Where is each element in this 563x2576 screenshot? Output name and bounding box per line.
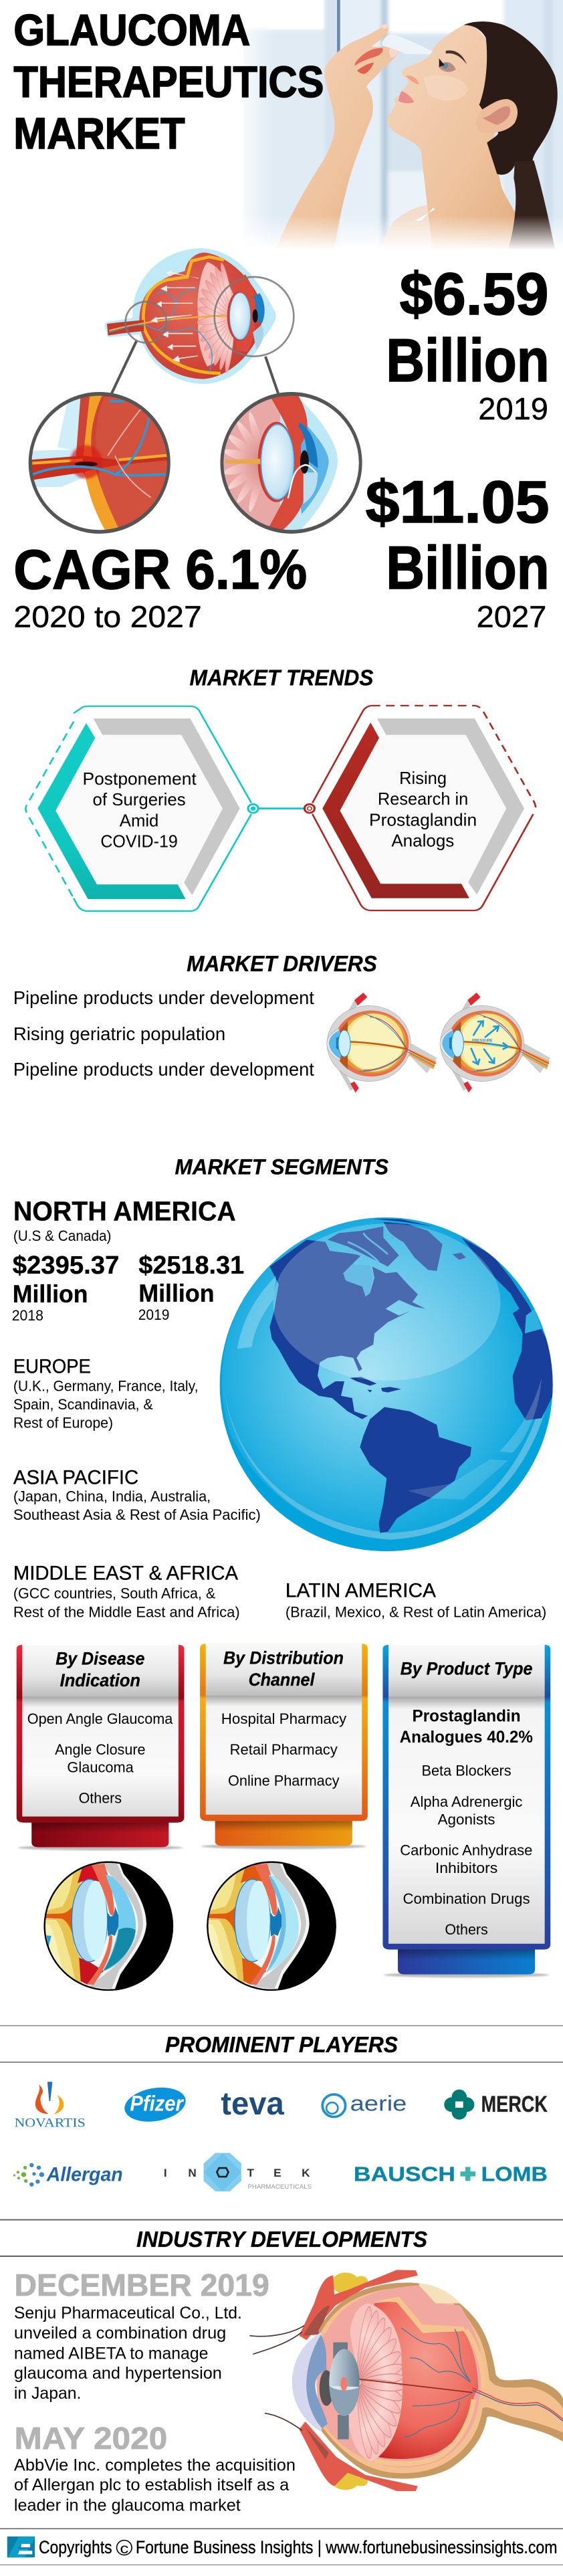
ciliary folds	[348, 2303, 403, 2462]
card: by distribution channel	[200, 1644, 368, 1849]
region: north america: Million	[138, 1280, 215, 1308]
hexagon: rising research: Rising	[399, 769, 447, 787]
region: north america: 2019	[138, 1306, 169, 1323]
logo: Allergan: Allergan	[46, 2164, 123, 2185]
photo: woman applying eye drops	[241, 0, 563, 250]
card: by disease indication: By Disease	[55, 1648, 144, 1669]
connector between hexagons	[248, 804, 314, 813]
card: by product type: Alpha Adrenergic	[411, 1793, 522, 1810]
logo: Merck	[444, 2090, 548, 2120]
connector lines	[112, 341, 278, 393]
region: asia pacific: (Japan, China, India, Australia,	[13, 1488, 211, 1504]
lashes	[249, 2326, 304, 2430]
hexagon: postponement of surgeries	[25, 706, 251, 911]
card: by product type: Agonists	[438, 1811, 495, 1827]
icon: eye with raised pressure: PRESSURE	[472, 1038, 493, 1043]
section: market segments	[12, 1155, 546, 1620]
region: north america: (U.S & Canada)	[13, 1227, 111, 1244]
stat: 2019 market value	[386, 261, 550, 427]
title and headline figures	[13, 6, 550, 633]
hair	[463, 21, 558, 175]
title: THERAPEUTICS	[13, 58, 324, 107]
logo: Inotek Pharmaceuticals: E	[273, 2167, 282, 2179]
list: market drivers: Rising geriatric population	[13, 1024, 225, 1044]
logo: Inotek Pharmaceuticals: T	[247, 2167, 255, 2179]
logo: Bausch + Lomb: BAUSCH	[354, 2163, 455, 2185]
list: market drivers	[13, 988, 314, 1080]
development: May 2020: MAY 2020	[14, 2421, 167, 2456]
cornea, iris and lens	[316, 2333, 339, 2430]
card: by disease indication: Open Angle Glaucoma	[27, 1710, 173, 1727]
card: by disease indication: Glaucoma	[67, 1759, 134, 1776]
stat: 2019 market value: Billion	[386, 326, 550, 395]
region: north america	[12, 1197, 244, 1324]
stat: 2019 market value: 2019	[478, 392, 548, 427]
illustration: anatomical eye	[249, 2270, 563, 2491]
list: market drivers: Pipeline products under development	[13, 1060, 314, 1080]
development: May 2020: leader in the glaucoma market	[14, 2496, 241, 2515]
region: north america: $2518.31	[138, 1252, 244, 1280]
card: by distribution channel: Retail Pharmacy	[230, 1741, 338, 1758]
card: by disease indication: Others	[79, 1789, 122, 1806]
region: middle east and africa	[13, 1561, 240, 1620]
logo: Bausch + Lomb: LOMB	[481, 2163, 548, 2185]
hexagon: rising research: Research in	[378, 789, 468, 809]
heading: market trends: MARKET TRENDS	[190, 665, 373, 690]
stat: CAGR	[13, 538, 307, 633]
region: europe: Spain, Scandinavia, &	[13, 1396, 153, 1413]
stat: CAGR: CAGR 6.1%	[13, 538, 307, 601]
stat: 2019 market value: $6.59	[400, 261, 549, 327]
land: north america	[269, 1240, 426, 1419]
region: europe	[13, 1355, 198, 1431]
land: south america	[360, 1407, 471, 1533]
arrows	[150, 270, 199, 363]
ponytail	[508, 161, 555, 249]
region: middle east and africa: (GCC countries, South Africa, &	[13, 1585, 215, 1601]
logo: Novartis	[14, 2082, 86, 2131]
logo: Inotek Pharmaceuticals	[164, 2153, 312, 2191]
land: caribbean islands	[350, 1377, 401, 1393]
card: by product type: Prostaglandin	[412, 1707, 521, 1726]
card: by product type: Others	[445, 1921, 488, 1938]
highlight over the northern hemisphere	[273, 1223, 500, 1381]
logo: Inotek Pharmaceuticals: N	[188, 2167, 197, 2179]
heading: market drivers: MARKET DRIVERS	[187, 951, 377, 976]
card: by product type: Beta Blockers	[421, 1763, 512, 1779]
card: by disease indication: Indication	[60, 1670, 140, 1690]
arm and hand	[276, 25, 399, 249]
stat: 2027 market value	[366, 469, 550, 633]
hexagon: postponement of surgeries: Postponement	[83, 769, 197, 788]
section: trends and drivers	[13, 665, 536, 1080]
magnified view: optic nerve	[28, 392, 171, 534]
sclera and optic nerve	[319, 2282, 563, 2479]
stat: 2027 market value: $11.05	[366, 469, 550, 536]
section: segmentation cards	[0, 1644, 563, 2025]
land: europe and africa	[370, 1219, 555, 1420]
logo: Inotek Pharmaceuticals: PHARMACEUTICALS	[248, 2183, 312, 2191]
development: May 2020: of Allergan plc to establish itself as a	[14, 2476, 290, 2494]
card: by distribution channel: By Distribution	[223, 1648, 344, 1668]
card: by distribution channel: Online Pharmacy	[228, 1772, 340, 1789]
region: north america: 2018	[12, 1307, 43, 1324]
card: by distribution channel: Channel	[249, 1670, 315, 1690]
region: north america: NORTH AMERICA	[13, 1197, 236, 1227]
logo: Inotek Pharmaceuticals: I	[164, 2167, 167, 2179]
icon: lens cross-section with open angle	[44, 1861, 174, 1991]
card: by disease indication	[17, 1645, 184, 1850]
title: GLAUCOMA	[13, 6, 250, 56]
globe	[214, 1217, 555, 1574]
logo: Pfizer	[122, 2083, 189, 2126]
icon: lens cross-section with closed angle	[207, 1861, 336, 1991]
development: December 2019: Senju Pharmaceutical Co., Ltd.	[14, 2304, 242, 2322]
region: north america: $2395.37	[13, 1252, 119, 1280]
region: asia pacific	[13, 1466, 261, 1523]
region: middle east and africa: Rest of the Middle East and Africa)	[13, 1603, 240, 1620]
development: May 2020	[14, 2421, 296, 2515]
stat: CAGR: 2020 to 2027	[13, 600, 202, 633]
region: middle east and africa: MIDDLE EAST & AFRICA	[13, 1561, 239, 1584]
region: asia pacific: Southeast Asia & Rest of Asia Pacific)	[13, 1506, 261, 1523]
heading: prominent players: PROMINENT PLAYERS	[165, 2033, 398, 2058]
hexagon: rising research: Analogs	[391, 831, 454, 850]
development: December 2019: DECEMBER 2019	[14, 2268, 269, 2302]
region: europe: Rest of Europe)	[13, 1414, 113, 1431]
region: europe: (U.K., Germany, France, Italy,	[13, 1378, 198, 1394]
arctic channels and hudson bay	[330, 1224, 401, 1296]
footer: logo and copyright: c	[120, 2541, 129, 2557]
eyelid muscles and fat	[299, 2270, 418, 2491]
stat: 2027 market value: 2027	[477, 600, 546, 633]
region: latin america: LATIN AMERICA	[286, 1579, 437, 1601]
region: asia pacific: ASIA PACIFIC	[13, 1466, 138, 1488]
card: by product type: Inhibitors	[435, 1860, 497, 1876]
card: by disease indication: Angle Closure	[55, 1741, 145, 1758]
title: MARKET	[13, 109, 185, 159]
list: market drivers: Pipeline products under development	[13, 988, 314, 1009]
region: north america: Million	[13, 1281, 88, 1308]
heading: industry developments: INDUSTRY DEVELOPMENTS	[136, 2227, 427, 2252]
logo: Novartis: NOVARTIS	[14, 2116, 86, 2131]
logo: Aerie: aerie	[350, 2091, 407, 2116]
retina	[361, 2300, 478, 2459]
card: by distribution channel: Hospital Pharmacy	[221, 1710, 347, 1727]
hexagon: postponement of surgeries: Amid	[120, 811, 158, 830]
face and neck	[387, 25, 515, 247]
logo: Pfizer: Pfizer	[130, 2091, 185, 2116]
logo: Teva: teva	[221, 2086, 285, 2122]
hexagon: rising research	[312, 706, 536, 910]
blood vessels	[401, 2328, 473, 2437]
heading: market segments: MARKET SEGMENTS	[175, 1155, 388, 1179]
development: December 2019: named AIBETA to manage	[14, 2345, 208, 2363]
stat: 2027 market value: Billion	[386, 534, 550, 602]
section: players, developments and footer	[0, 2033, 563, 2565]
footer: logo and copyright: Copyrights	[39, 2537, 112, 2557]
icon: eye with raised pressure	[440, 993, 550, 1092]
zoom circles	[126, 277, 294, 357]
illustration: eye cross-section with zoom circles	[104, 248, 294, 384]
development: May 2020: AbbVie Inc. completes the acquisition	[14, 2456, 296, 2474]
development: December 2019: in Japan.	[14, 2384, 81, 2403]
hexagon: postponement of surgeries: of Surgeries	[93, 790, 186, 809]
region: europe: EUROPE	[13, 1355, 91, 1377]
icon: healthy eye	[327, 993, 437, 1092]
logo: Inotek Pharmaceuticals: K	[302, 2167, 310, 2179]
glass reflections	[237, 1276, 542, 1500]
hexagon: rising research: Prostaglandin	[369, 810, 477, 829]
magnified view: lens and cornea	[222, 393, 360, 535]
hexagon: postponement of surgeries: COVID-19	[100, 832, 178, 851]
region: latin america	[286, 1579, 546, 1620]
title	[13, 6, 324, 159]
development: December 2019	[14, 2268, 269, 2403]
development: December 2019: unveiled a combination drug	[14, 2324, 226, 2343]
logo: Allergan	[13, 2163, 123, 2187]
development: December 2019: glaucoma and hypertension	[14, 2364, 222, 2383]
card: by product type	[382, 1645, 550, 1977]
logo: Aerie	[322, 2091, 407, 2117]
logo: Bausch + Lomb	[354, 2163, 548, 2185]
